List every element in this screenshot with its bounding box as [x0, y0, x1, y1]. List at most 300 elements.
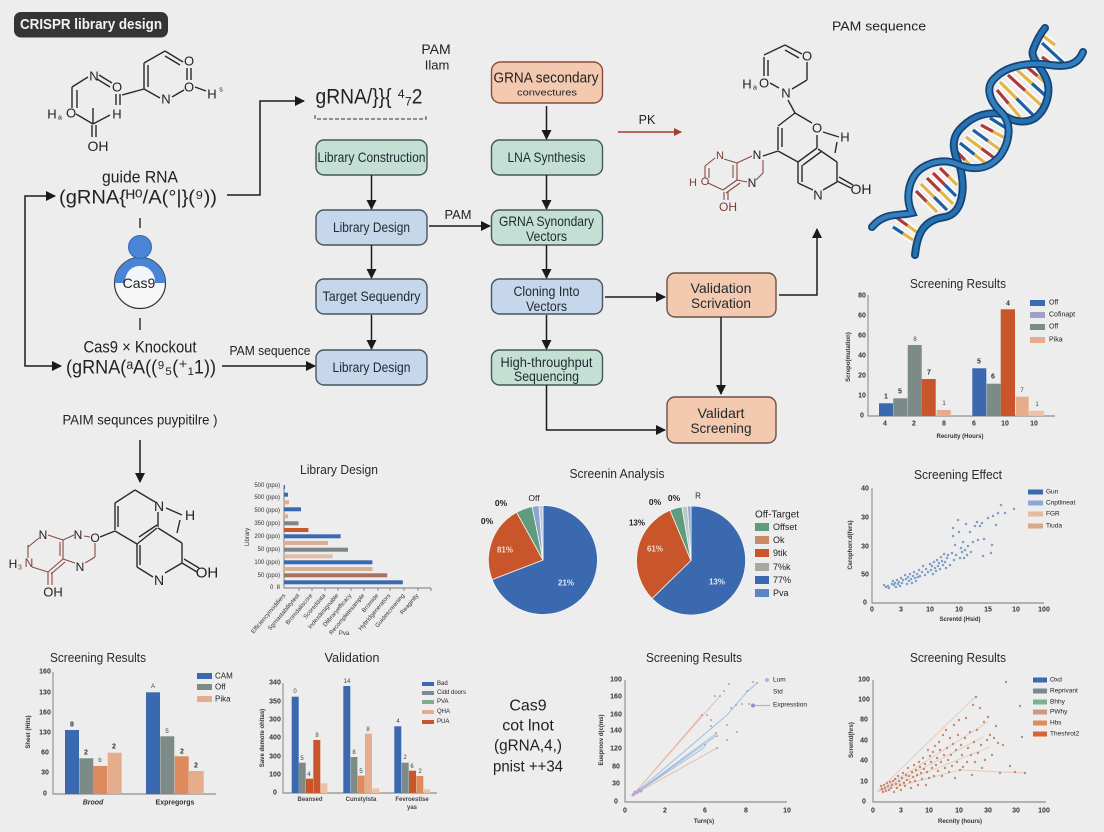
- molecule: lower left: O: [90, 531, 100, 545]
- text block: Cas9 cot Inot: [493, 698, 563, 776]
- arrow: [370, 175, 372, 209]
- pie: right: [637, 506, 746, 615]
- axis labels: 0: [871, 808, 875, 814]
- axis labels: Guidescreening: [375, 593, 406, 629]
- bar values: [884, 300, 1039, 408]
- axis labels: 0: [862, 798, 866, 806]
- axis labels: 350 (ppo): [254, 521, 280, 527]
- axis labels: 40: [860, 758, 868, 764]
- title: Screening Results: [50, 651, 146, 665]
- molecule: upper right: N: [748, 176, 756, 190]
- molecule: lower left: OH: [196, 564, 218, 582]
- axis labels: Recnity (hours): [938, 819, 982, 825]
- axis labels: yas: [407, 805, 418, 811]
- axis labels: 160: [610, 712, 622, 718]
- bar values: 0: [293, 689, 297, 695]
- molecule: top left: H: [207, 86, 217, 102]
- axis labels: 60: [858, 332, 866, 340]
- axis labels: 200 (ppo): [254, 534, 280, 540]
- axis labels: Screpo(mutation): [846, 332, 852, 382]
- flow box: Cloning into Vectors: Cloning Into: [514, 283, 580, 299]
- legend: QHA: [437, 709, 450, 715]
- axis labels: 50 (ppo): [258, 573, 280, 579]
- molecule: upper right: OH: [719, 200, 737, 214]
- axis labels: 0: [273, 790, 277, 796]
- axis labels: [26, 668, 195, 806]
- legend: PVA: [437, 699, 449, 705]
- label: PAM sequence top: PAM sequence: [832, 18, 926, 34]
- label: PAM Ilam: Ilam: [425, 58, 449, 72]
- bars: [879, 309, 1044, 416]
- bars: [292, 686, 430, 793]
- title: Screening Results: [910, 651, 1006, 665]
- molecule: upper right: N: [781, 86, 791, 100]
- axis labels: 100: [858, 676, 870, 684]
- flow box: Library Design lower: [316, 350, 427, 385]
- molecule: upper right: H: [689, 177, 697, 189]
- legend: Expresstion: [773, 702, 807, 708]
- legend: Bad: [437, 681, 448, 687]
- arrow: Validation to molecule: [779, 229, 817, 295]
- molecule: lower left: N: [74, 528, 82, 542]
- fan lines: [877, 697, 1025, 792]
- legend: Off: [215, 682, 226, 692]
- molecule: upper right: O: [802, 48, 812, 64]
- axis labels: 30: [861, 544, 869, 550]
- legend: CAM: [215, 672, 233, 680]
- pie: left labels: 0%: [481, 516, 494, 526]
- axis labels: [846, 292, 1038, 440]
- axis labels: 10: [860, 778, 868, 786]
- legend: PUA: [437, 719, 449, 725]
- molecule: top left: O: [184, 54, 194, 68]
- flow box: Validation Scrivation: Validation: [690, 280, 752, 296]
- flow box: Library Construction: [316, 140, 427, 175]
- flow box: Validant Screening: Screening: [690, 420, 752, 436]
- axis labels: 100: [610, 676, 622, 684]
- chart: Validation: [260, 651, 466, 811]
- pie: left labels: 21%: [558, 578, 574, 588]
- axis labels: 6: [972, 420, 976, 428]
- legend: 77%: [773, 575, 791, 585]
- flow box: Validation Scrivation: Scrivation: [691, 295, 751, 311]
- axis labels: 350: [269, 698, 281, 706]
- molecule: lower left: N: [25, 556, 33, 570]
- axis labels: Eueproov d(c(ms): [599, 714, 605, 766]
- axis labels: 40: [858, 352, 866, 360]
- chart: Screening Analysis pies: [481, 467, 799, 615]
- flow box: Target Sequendry: [316, 279, 427, 314]
- axis labels: Cerophorr.d(fers): [848, 520, 854, 570]
- axis labels: 2: [912, 420, 916, 428]
- bars: [65, 692, 204, 794]
- axis labels: Sheet (Hits): [26, 715, 32, 749]
- molecule: lower left: N: [154, 572, 164, 588]
- molecule: top left: [47, 51, 223, 154]
- chart: Screening Results top right: [846, 277, 1075, 440]
- molecule: top left: O: [112, 80, 122, 94]
- title: Screening Effect: [914, 468, 1002, 482]
- legend: Tiuda: [1046, 522, 1062, 530]
- bar values: A: [151, 684, 155, 690]
- flow box: DNA Synthesis: [492, 140, 602, 175]
- axis labels: Library: [245, 528, 251, 546]
- axis labels: 60: [858, 312, 866, 320]
- axis labels: 50: [861, 572, 869, 578]
- axis labels: 30: [612, 780, 620, 788]
- bar values: 2: [403, 755, 407, 761]
- axis labels: 500 (ppo): [254, 508, 280, 514]
- arrow: guide RNA to gRNA: [227, 101, 304, 195]
- arrow: Validation to Validant: [720, 317, 722, 394]
- flow box: Library Construction: Library Construction: [318, 149, 426, 165]
- axis labels: 100: [1038, 808, 1050, 814]
- axis labels: 20: [858, 372, 866, 380]
- molecule: lower left: 3: [18, 564, 22, 572]
- bar values: 8: [352, 750, 356, 756]
- flow box: High-throughput Sequencing: [492, 350, 602, 385]
- legend: Oxd: [1050, 676, 1062, 684]
- legend: Off: [1049, 324, 1058, 330]
- axis labels: 8: [744, 808, 748, 814]
- pie: left labels: 81%: [497, 546, 513, 554]
- axis labels: [848, 486, 1050, 623]
- axis labels: 80: [860, 716, 868, 724]
- axis labels: 3: [899, 808, 903, 814]
- flow box: GRNA secondary: [492, 62, 602, 103]
- molecule: lower left: OH: [43, 584, 63, 600]
- legend: Pika: [215, 694, 231, 704]
- bar values: 8: [366, 727, 370, 733]
- bar values: 8: [70, 722, 74, 728]
- bar values: 5: [898, 388, 902, 396]
- pie: right labels: 13%: [709, 578, 725, 586]
- axis labels: 500 (ppo): [254, 495, 280, 501]
- arrow: [370, 315, 372, 349]
- axis labels: 80: [612, 764, 620, 770]
- arrow: PK: [618, 131, 681, 133]
- legend: Cnptlineat: [1046, 500, 1075, 506]
- text block: Cas9 cot Inot: Cas9: [509, 698, 547, 714]
- bar values: 5: [977, 358, 981, 366]
- axis labels: 40: [860, 738, 868, 744]
- bar values: 2: [194, 762, 198, 770]
- axis labels: 130: [39, 690, 51, 696]
- legend: Ok: [773, 535, 785, 545]
- bar values: 7: [927, 370, 931, 376]
- axis labels: 100: [858, 696, 870, 704]
- flow box: Library Design: Library Design: [333, 219, 410, 235]
- axis labels: 30: [1012, 808, 1020, 814]
- legend: 9tik: [773, 548, 788, 558]
- axis labels: 0 8: [270, 585, 281, 591]
- chart: Screening Results scatter: [849, 651, 1080, 825]
- axis labels: 160: [610, 694, 622, 700]
- bar values: 2: [84, 750, 88, 756]
- molecule: top left: s: [219, 86, 223, 94]
- chart: Screening Results lines: [599, 651, 807, 825]
- arrow: [546, 245, 548, 278]
- arrow: Cas9 to library design: [222, 365, 315, 367]
- axis labels: 10: [783, 808, 791, 814]
- axis labels: [260, 680, 429, 811]
- axis labels: 10: [858, 392, 866, 400]
- axis labels: Scoreddata: [303, 593, 328, 620]
- arrow: [370, 245, 372, 278]
- legend: Offset: [773, 522, 797, 532]
- bar values: 5: [300, 756, 304, 762]
- label: gRNA formula: gRNA/}}{ ⁴₇2: [316, 86, 422, 108]
- bar values: 1: [1035, 402, 1039, 408]
- bar values: b: [98, 758, 102, 764]
- axis labels: Pva: [339, 631, 350, 637]
- label: guide RNA: guide RNA: [102, 168, 179, 186]
- axis labels: 0: [623, 808, 627, 814]
- pie: right labels: 61%: [647, 544, 663, 554]
- axis labels: 10: [1012, 606, 1020, 614]
- label: PAM: PAM: [444, 208, 472, 222]
- legend: Off: [1049, 300, 1058, 306]
- flow box: DNA Synthesis: LNA Synthesis: [508, 149, 586, 165]
- label: guide RNA: [59, 168, 217, 208]
- flow box: High-throughput Sequencing: Sequencing: [514, 368, 579, 384]
- arrow: [546, 315, 548, 349]
- axis labels: 15: [984, 606, 992, 614]
- bar values: [293, 679, 422, 778]
- bar values: 2: [418, 769, 422, 775]
- bar values: 8: [315, 733, 319, 739]
- axis labels: [849, 676, 1050, 825]
- label: PAM sequences purity: PAIM sequnces puypitilre ): [62, 412, 218, 428]
- axis labels: Hybridgenerators: [358, 593, 392, 632]
- axis labels: Fevroestise: [395, 797, 429, 803]
- molecule: upper right: O: [812, 120, 822, 136]
- axis labels: Brood: [83, 800, 104, 806]
- label: PAM Ilam: [421, 41, 451, 72]
- pie: right labels: 13%: [629, 518, 645, 528]
- molecule: top left: N: [89, 68, 99, 84]
- axis labels: 50 (ppo): [258, 547, 280, 553]
- molecule: lower left: H: [185, 507, 195, 523]
- axis labels: 100: [1038, 606, 1050, 614]
- axis labels: 30: [41, 770, 49, 776]
- axis labels: 2: [663, 808, 667, 814]
- label: Cas9 knockout: [66, 338, 216, 378]
- legend: [1030, 300, 1075, 344]
- molecule: upper right: O: [701, 176, 710, 188]
- axis labels: Screntd(hrs): [849, 722, 855, 758]
- legend: Theshrot2: [1050, 730, 1080, 738]
- axis labels: 300: [269, 754, 281, 760]
- label: PK: PK: [639, 113, 656, 127]
- legend: PWhy: [1050, 708, 1068, 716]
- axis labels: 120: [610, 746, 622, 752]
- molecule: lower left: N: [76, 560, 84, 574]
- pie: left: [488, 505, 597, 614]
- axis labels: Efficiencymodifiers: [251, 593, 287, 635]
- text block: Cas9 cot Inot: cot lnot: [502, 718, 554, 734]
- axis labels: Recruity (Hours): [936, 434, 984, 440]
- icon: Cas9: Cas9: [123, 275, 156, 291]
- flow box: High-throughput Sequencing: High-throughput: [500, 354, 593, 370]
- bar values: 8: [913, 337, 917, 343]
- legend: Pva: [773, 588, 789, 598]
- bars: [284, 485, 403, 584]
- molecule: upper right: N: [813, 188, 823, 202]
- molecule: upper right: OH: [850, 181, 872, 197]
- bar values: 6: [410, 764, 414, 770]
- icon: Cas9: [114, 218, 166, 330]
- axis labels: 10: [1001, 420, 1009, 428]
- axes: [868, 295, 1055, 416]
- molecule: top left: O: [184, 80, 194, 94]
- axis labels: 60: [41, 750, 49, 756]
- axis labels: 0: [860, 412, 864, 420]
- bar values: 4: [396, 719, 400, 725]
- bar values: 5: [165, 729, 169, 735]
- axis labels: 160: [39, 668, 51, 676]
- bar values: 5: [359, 769, 363, 775]
- axis labels: Turn(s): [694, 819, 714, 825]
- label: guide RNA: (gRNA{ᴴ⁰/A(°|}(⁹)): [59, 188, 217, 208]
- bar values: 2: [180, 748, 184, 756]
- axis labels: Dlibraryefficacy: [322, 593, 353, 628]
- molecule: top left: O: [66, 106, 76, 120]
- title: Validation: [324, 651, 380, 665]
- axis labels: 0: [863, 600, 867, 606]
- legend: Pika: [1049, 336, 1063, 344]
- legend: [755, 510, 799, 598]
- bar values: 4: [1006, 300, 1010, 308]
- dots: [881, 682, 1025, 792]
- arrow: [546, 175, 548, 209]
- axis labels: 3: [899, 606, 903, 614]
- axis labels: 130: [39, 730, 51, 736]
- arrow: Library Design to GRNA: [429, 225, 490, 227]
- legend: Off-Target: [755, 510, 799, 520]
- title: Screening Results: [646, 651, 742, 665]
- axis labels: [599, 676, 791, 825]
- legend: [197, 672, 233, 704]
- molecule: upper right: N: [716, 150, 724, 162]
- legend: [422, 681, 466, 725]
- title: Library Design: [300, 463, 378, 477]
- arrow: Cloning to Validation: [605, 296, 665, 298]
- text block: Cas9 cot Inot: (gRNA,4,): [494, 738, 562, 754]
- molecule: upper right: H: [840, 130, 850, 144]
- axis labels: Screntd (Hsid): [939, 617, 981, 623]
- legend: Reprivant: [1050, 688, 1078, 694]
- legend: FGR: [1046, 510, 1060, 518]
- flow box: GRNA Synondary Vectors: Vectors: [526, 228, 567, 244]
- axis labels: 100 (ppo): [254, 560, 280, 566]
- flow box: Library Design: [316, 210, 427, 245]
- scatter dots: [702, 682, 757, 748]
- axis labels: 0: [43, 790, 47, 798]
- pie: right labels: R: [695, 492, 701, 500]
- flow box: Library Design lower: Library Design: [332, 359, 410, 375]
- dots: [633, 790, 641, 795]
- title: Screenin Analysis: [570, 467, 664, 481]
- text block: Cas9 cot Inot: pnist ++34: [493, 758, 563, 776]
- axis labels: 80: [858, 292, 866, 300]
- axis labels: 400: [269, 734, 281, 742]
- arrow: [546, 106, 548, 139]
- bar values: 14: [344, 679, 351, 685]
- label: Cas9 knockout: (gRNA(ᵃA((⁹₅(⁺₁1)): [66, 358, 216, 378]
- arrows: left bracket: [25, 196, 61, 366]
- molecule: upper right: a: [753, 84, 757, 92]
- pie: left labels: Off: [528, 493, 540, 503]
- flow box: Cloning into Vectors: Vectors: [526, 298, 567, 314]
- axes: [283, 683, 437, 793]
- axis labels: Save demote ohltas): [260, 709, 266, 767]
- title: Screening Results: [910, 277, 1006, 291]
- bar values: [70, 684, 198, 770]
- bar values: 7: [1020, 388, 1024, 394]
- axis labels: 10: [955, 808, 963, 814]
- axis labels: [245, 483, 420, 637]
- axis labels: 40: [861, 486, 869, 492]
- chart: Library Design horizontal bars: [245, 463, 431, 637]
- badge: CRISPR library design: [14, 12, 168, 38]
- bar values: 4: [307, 772, 311, 778]
- legend: Lum: [773, 676, 786, 684]
- pie: right labels: 0%: [668, 493, 681, 503]
- axis labels: 340: [269, 680, 281, 686]
- arrow: Sequencing to Validant: [546, 385, 665, 430]
- chart: Screening Results bottom left: [26, 651, 233, 806]
- molecule: lower left: H: [9, 557, 17, 571]
- pie: left labels: [481, 493, 574, 588]
- legend: Cidd doors: [437, 690, 466, 696]
- bar values: 6: [991, 374, 995, 380]
- axis labels: 140: [610, 728, 622, 734]
- molecule: upper right: H: [742, 76, 752, 92]
- chart: Screening Effect scatter: [848, 468, 1075, 623]
- legend: [1028, 488, 1075, 530]
- molecule: lower left: N: [39, 528, 47, 542]
- flow box: Validant Screening: [667, 397, 776, 443]
- badge: CRISPR library design: CRISPR library design: [20, 16, 162, 33]
- molecule: lower left: N: [154, 498, 164, 514]
- flow box: GRNA Synondary Vectors: GRNA Synondary: [499, 213, 594, 229]
- legend: [751, 676, 807, 708]
- axis labels: 4: [883, 420, 887, 428]
- flow box: GRNA Synondary Vectors: [492, 210, 602, 245]
- bar values: 2: [112, 744, 116, 750]
- label: PAM Ilam: PAM: [421, 41, 451, 57]
- axis labels: 100: [269, 772, 281, 778]
- molecule: top left: H: [47, 106, 57, 122]
- legend: 7%k: [773, 562, 791, 572]
- bar values: 1: [884, 394, 888, 400]
- molecule: upper right: O: [759, 76, 769, 90]
- label: Cas9 knockout: Cas9 × Knockout: [84, 338, 197, 356]
- axis labels: Beansed: [297, 797, 323, 803]
- pie: right labels: [629, 492, 725, 586]
- axis labels: 10: [955, 606, 963, 614]
- legend: Std: [773, 688, 783, 696]
- axis labels: Recompletesample: [329, 593, 367, 636]
- dots: [884, 505, 1014, 588]
- legend: Cofinapt: [1049, 312, 1075, 318]
- axis labels: 160: [39, 710, 51, 716]
- axis labels: 30: [861, 514, 869, 522]
- axes: [872, 488, 1044, 603]
- axis labels: 10: [926, 606, 934, 614]
- molecule: lower left: [9, 490, 218, 600]
